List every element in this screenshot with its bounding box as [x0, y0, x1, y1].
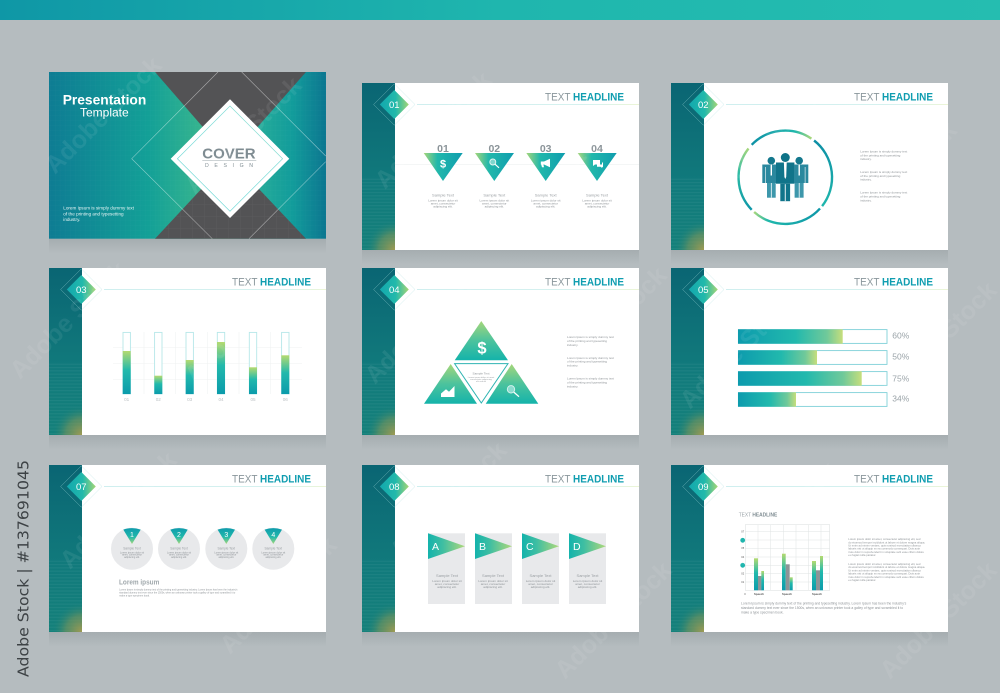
text block right: irure dolor in reprehenderit in voluptate velit esse cillum dolore: [848, 550, 924, 554]
card D: adipiscing elit.: [578, 585, 597, 589]
grouped bar chart: 02: [741, 572, 745, 576]
headline: TEXT HEADLINE: [545, 276, 624, 288]
circle card 1: Lorem ipsum dolor sit: [120, 551, 144, 554]
step 04: Sample Text: [586, 193, 609, 198]
text block: Lorem Ipsum is simply dummy text: [567, 335, 614, 339]
lorem ipsum text block: standard dummy text ever since the 1500s, when an unknown printer took a galley of type and scrambled it to: [119, 591, 236, 594]
step 04: amet, consectetur: [585, 201, 609, 205]
watermarks: Adobe Stock: [179, 261, 307, 389]
card D: amet, consectetur: [575, 582, 600, 586]
bar chart: 06: [283, 397, 288, 402]
bar chart: 04: [218, 397, 224, 402]
circle card 4: [252, 528, 294, 570]
circle card 2: 2: [177, 532, 181, 539]
triangle diagram: consectetur adipiscing: [470, 378, 493, 381]
dark shape: bottom: [155, 158, 306, 239]
card B: Sample Text: [482, 573, 505, 578]
icon: magnifier: [507, 386, 519, 397]
slide number: 03: [76, 285, 87, 296]
headline: TEXT HEADLINE: [232, 276, 311, 288]
card A: A: [432, 541, 439, 553]
step 02: Lorem ipsum dolor sit: [480, 198, 509, 202]
card A: Lorem ipsum dolor sit: [432, 579, 462, 583]
circle card 3: amet, consectetur: [216, 554, 236, 557]
step 03: [526, 143, 565, 208]
text block: Lorem Ipsum is simply dummy text: [860, 149, 907, 153]
text block right: Lorem ipsum dolor sit amet, consectetur adipiscing elit, sed: [848, 537, 921, 541]
bar chart: 03: [187, 397, 193, 402]
lorem ipsum text block: [119, 580, 238, 597]
watermarks: Adobe Stock: [874, 276, 1000, 404]
text block: Lorem Ipsum is simply dummy text: [860, 191, 907, 195]
text block: Lorem Ipsum is simply dummy text: [860, 170, 907, 174]
circle card 4: amet, consectetur: [263, 554, 283, 557]
text block: of the printing and typesetting: [567, 380, 607, 384]
text block right: laboris nisi ut aliquip ex ea commodo consequat. Duis aute: [848, 572, 920, 576]
grouped bar chart: 05: [741, 546, 745, 550]
text block: industry.: [860, 157, 872, 161]
circle card 2: adipiscing elit.: [171, 556, 187, 559]
watermarks: Adobe Stock: [674, 286, 802, 414]
step 04: [578, 143, 617, 208]
step 02: 02: [488, 143, 500, 155]
stock id side text: Adobe Stock | #137691045: [14, 460, 32, 677]
cover title: Presentation: [63, 92, 146, 107]
triangle diagram: Lorem ipsum dolor sit amet: [468, 376, 495, 379]
thin outline diamond: [132, 72, 326, 239]
grouped bar chart: 0: [744, 592, 746, 596]
step 02: Sample Text: [483, 193, 506, 198]
cover title: Template: [80, 106, 129, 120]
panel: slide 05: [671, 268, 948, 450]
card D: D: [573, 541, 581, 553]
card D: Sample Text: [577, 573, 599, 578]
step 03: amet, consectetur: [533, 201, 558, 205]
progress bar 75%: 75%: [892, 374, 910, 384]
card A: adipiscing elit.: [437, 585, 457, 589]
circle card 4: 4: [271, 532, 275, 539]
bar chart: 02: [156, 397, 161, 402]
text block: of the printing and typesetting: [860, 195, 901, 199]
segmented ring: [739, 131, 832, 224]
step 01: adipiscing elit.: [433, 204, 453, 208]
progress bar 60%: [738, 329, 910, 344]
circle card 4: Sample Text: [265, 546, 282, 550]
watermarks: Adobe Stock: [549, 556, 677, 684]
panel: slide 02: [671, 83, 948, 265]
circle card 2: amet, consectetur: [169, 554, 189, 557]
icon: team of people: [762, 153, 808, 201]
text block: of the printing and typesetting: [860, 174, 901, 178]
step 02: [475, 143, 514, 208]
panel: slide 04: [362, 268, 639, 450]
text block right: irure dolor in reprehenderit in voluptate velit esse cillum dolore: [848, 575, 924, 579]
text block bottom: standard dummy text ever since the 1500s, when an unknown printer took a galley of type and scrambled it to: [741, 606, 903, 610]
step 04: 04: [591, 143, 603, 155]
text block bottom: Lorem Ipsum is simply dummy text of the printing and typesetting industry. Lorem Ipsum has been the industry's: [741, 602, 907, 606]
circle card 1: adipiscing elit.: [124, 556, 140, 559]
progress bar 60%: 60%: [892, 330, 910, 340]
headline: TEXT HEADLINE: [854, 276, 933, 288]
card A: [428, 533, 465, 604]
watermarks: Adobe Stock: [494, 111, 622, 239]
grouped bar chart: 01: [741, 580, 745, 584]
slide number: 08: [389, 482, 400, 493]
inner diamond line: [177, 106, 283, 211]
step 01: 01: [437, 143, 449, 155]
cover intro text: industry.: [63, 217, 80, 222]
step 02: adipiscing elit.: [485, 204, 504, 208]
slide number: 04: [389, 285, 400, 296]
watermarks: Adobe Stock: [714, 456, 842, 584]
step 02: amet, consectetur: [482, 201, 507, 205]
text block right: [848, 537, 925, 582]
triangle diagram: elit sed do: [476, 380, 487, 383]
progress bar 75%: [738, 371, 910, 386]
step 03: adipiscing elit.: [536, 204, 556, 208]
cover intro text: of the printing and typesetting: [63, 212, 124, 216]
headline: TEXT HEADLINE: [545, 91, 624, 103]
circle card 3: [205, 528, 247, 570]
circle card 1: [111, 528, 153, 570]
card A: Sample Text: [436, 573, 459, 578]
triangle diagram: Sample Text: [473, 372, 490, 376]
panel: slide 01: [362, 83, 639, 265]
text block: [567, 335, 614, 388]
step 03: Sample Text: [535, 193, 558, 198]
slide number: 02: [698, 100, 709, 111]
text block right: Lorem ipsum dolor sit amet, consectetur adipiscing elit, sed: [848, 562, 921, 566]
headline: TEXT HEADLINE: [545, 473, 624, 485]
watermarks: Adobe Stock: [179, 71, 307, 199]
watermarks: Adobe Stock: [4, 256, 132, 384]
progress bar 34%: [738, 392, 910, 407]
circle card 2: Sample Text: [170, 546, 188, 550]
slide number: 07: [76, 482, 87, 493]
text block right: do eiusmod tempor incididunt ut labore et dolore magna aliqua.: [848, 565, 925, 569]
cover title: [63, 92, 146, 120]
text block: Lorem Ipsum is simply dummy text: [567, 356, 614, 360]
watermarks: Adobe Stock: [39, 51, 167, 179]
step 01: Lorem ipsum dolor sit: [428, 198, 458, 202]
chart heading: TEXT HEADLINE: [739, 512, 778, 518]
slide number: 09: [698, 482, 709, 493]
text block: of the printing and typesetting: [860, 153, 901, 157]
top teal band: [0, 0, 1000, 20]
card C: Sample Text: [530, 573, 552, 578]
bar chart: 05: [250, 397, 256, 402]
panel: slide 09: [671, 465, 948, 647]
text block right: eu fugiat nulla pariatur.: [848, 578, 876, 582]
headline: TEXT HEADLINE: [854, 473, 933, 485]
grouped bar chart: 04: [741, 555, 745, 559]
grouped bar chart: Speech: [782, 592, 792, 596]
bar chart: [113, 332, 302, 402]
cover label: COVER: [202, 146, 256, 163]
text block: industry.: [860, 198, 872, 202]
step 01: $: [440, 158, 446, 170]
step 03: Lorem ipsum dolor sit: [531, 198, 561, 202]
cover intro text: Lorem Ipsum is simply dummy text: [63, 205, 135, 210]
grouped bar chart: Speech: [754, 592, 764, 596]
circle card 1: Sample Text: [123, 546, 141, 550]
circle card 1: 1: [130, 532, 134, 539]
slide number: 01: [389, 100, 400, 111]
grouped bar chart: [740, 525, 830, 596]
text block: [860, 149, 907, 202]
panel: slide 07: [49, 465, 326, 647]
lorem ipsum text block: Lorem ipsum: [119, 580, 159, 587]
card C: [522, 533, 559, 604]
circle card 2: Lorem ipsum dolor sit: [167, 551, 191, 554]
watermarks: Adobe Stock: [359, 261, 487, 389]
lorem ipsum text block: make a type specimen book.: [119, 594, 150, 597]
circle card 3: Lorem ipsum dolor sit: [214, 551, 239, 554]
text block: industry.: [567, 343, 578, 347]
headline: TEXT HEADLINE: [854, 91, 933, 103]
card A: amet, consectetur: [435, 582, 459, 586]
card C: Lorem ipsum dolor sit: [526, 579, 555, 583]
progress bar 34%: 34%: [892, 393, 910, 403]
circle card 3: adipiscing elit.: [218, 556, 234, 559]
slide number: 05: [698, 285, 709, 296]
circle card 3: 3: [224, 532, 228, 539]
dark shape: top: [155, 72, 306, 158]
watermarks: Adobe Stock: [699, 81, 827, 209]
text block right: Ut enim ad minim veniam, quis nostrud exercitation ullamco: [848, 568, 921, 572]
cover label: DESIGN: [205, 163, 253, 169]
panel: slide 03: [49, 268, 326, 450]
grouped bar chart: 07: [741, 530, 745, 534]
card B: amet, consectetur: [481, 582, 505, 586]
text block right: Ut enim ad minim veniam, quis nostrud exercitation ullamco: [848, 544, 921, 548]
card B: adipiscing elit.: [483, 585, 503, 589]
circle card 4: adipiscing elit.: [265, 556, 281, 559]
text block: industry.: [860, 178, 872, 182]
card C: adipiscing elit.: [531, 585, 550, 589]
watermarks: Adobe Stock: [54, 446, 182, 574]
text block: industry.: [567, 384, 578, 388]
circle card 2: [158, 528, 200, 570]
step 03: 03: [540, 143, 552, 155]
text block bottom: make a type specimen book.: [741, 611, 784, 615]
icon: dollar: $: [477, 340, 487, 358]
watermarks: Adobe Stock: [369, 66, 497, 194]
panel: slide 08: [362, 465, 639, 647]
step 01: amet, consectetur: [431, 201, 455, 205]
triangle diagram: [424, 321, 538, 404]
circle card 1: amet, consectetur: [122, 554, 142, 557]
text block: of the printing and typesetting: [567, 360, 607, 364]
progress bar 50%: [738, 350, 910, 365]
card C: amet, consectetur: [528, 582, 553, 586]
panel: cover slide: [49, 72, 326, 254]
text block right: laboris nisi ut aliquip ex ea commodo consequat. Duis aute: [848, 547, 920, 551]
step 01: [424, 143, 463, 208]
grouped bar chart: Speech: [812, 592, 822, 596]
card D: Lorem ipsum dolor sit: [573, 579, 602, 583]
card B: [475, 533, 512, 604]
progress bar 50%: 50%: [892, 352, 910, 362]
step 04: Lorem ipsum dolor sit: [582, 198, 612, 202]
text block: industry.: [567, 364, 578, 368]
watermarks: Adobe Stock: [384, 436, 512, 564]
cover intro text: [63, 205, 135, 222]
text block bottom: [741, 602, 907, 615]
text block right: do eiusmod tempor incididunt ut labore et dolore magna aliqua.: [848, 540, 925, 544]
text block: Lorem Ipsum is simply dummy text: [567, 377, 614, 381]
watermarks: Adobe Stock: [834, 116, 962, 244]
step 01: Sample Text: [432, 193, 455, 198]
card C: C: [526, 541, 534, 553]
white centre diamond: [171, 99, 289, 218]
circle card 4: Lorem ipsum dolor sit: [261, 551, 286, 554]
circle card 3: Sample Text: [218, 546, 235, 550]
step 04: adipiscing elit.: [587, 204, 607, 208]
watermarks: Adobe Stock: [544, 261, 672, 389]
text block right: eu fugiat nulla pariatur.: [848, 553, 876, 557]
card B: Lorem ipsum dolor sit: [478, 579, 508, 583]
headline: TEXT HEADLINE: [232, 473, 311, 485]
watermarks: Adobe Stock: [214, 531, 342, 659]
watermarks: Adobe Stock: [874, 556, 1000, 684]
lorem ipsum text block: Lorem Ipsum is simply dummy text of the printing and typesetting industry. Lorem Ipsum has been the industry's: [119, 588, 238, 591]
card D: [569, 533, 606, 604]
card B: B: [479, 541, 486, 553]
bar chart: 01: [124, 397, 130, 402]
icon: growth chart: [441, 386, 454, 397]
text block: of the printing and typesetting: [567, 339, 607, 343]
